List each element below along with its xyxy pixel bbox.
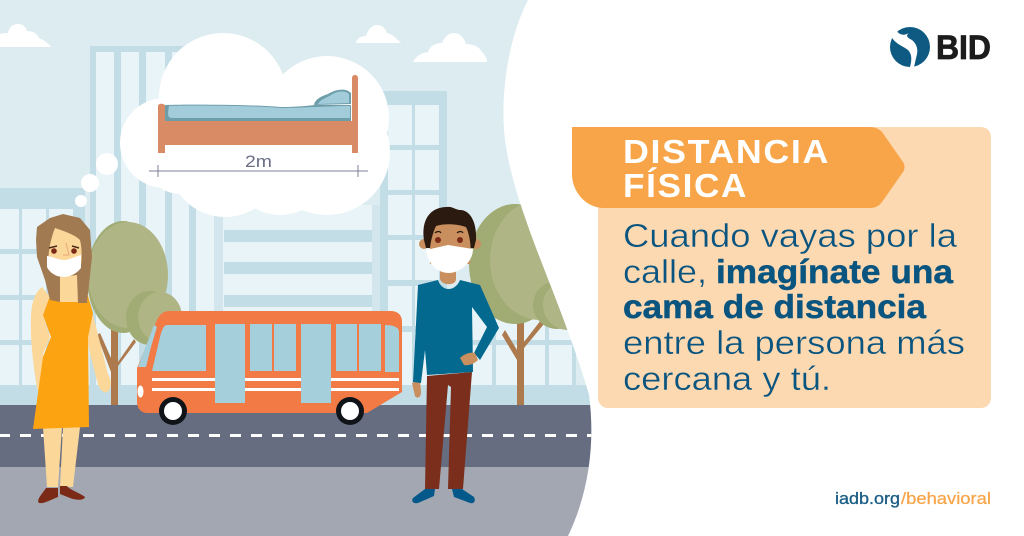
panel: message <box>572 127 991 408</box>
building: left <box>0 188 85 405</box>
cloud: top middle <box>356 25 401 43</box>
building: center horizontal stripes <box>214 205 380 311</box>
footer url: /behavioral <box>901 490 991 508</box>
thought cloud <box>75 33 390 217</box>
road centre dashes <box>0 434 600 437</box>
ground strip <box>88 385 590 406</box>
tree: right <box>469 204 568 405</box>
man <box>412 207 499 503</box>
building: right windows <box>380 91 447 385</box>
body text: Cuando vayas por la <box>623 217 958 254</box>
body text: cercana y tú. <box>623 360 831 397</box>
heading: FÍSICA <box>623 167 748 204</box>
bed length label: 2m <box>245 152 272 171</box>
road <box>0 405 600 467</box>
body text: entre la persona más <box>623 324 965 361</box>
footer url: iadb.org <box>835 490 900 508</box>
logo: BID <box>890 27 991 67</box>
heading <box>623 133 830 204</box>
building: behind right tree <box>447 300 576 385</box>
woman <box>31 214 111 503</box>
cloud: top right <box>413 33 487 62</box>
icon: globe <box>890 27 930 67</box>
body text: imagínate una <box>716 253 954 290</box>
body text <box>623 217 965 397</box>
panel background <box>598 127 991 408</box>
body text: calle, <box>623 253 707 290</box>
tree: left <box>87 221 182 405</box>
bus <box>137 311 402 425</box>
wordmark: BID <box>936 29 991 67</box>
cloud: top left <box>0 24 51 47</box>
illustrated street scene <box>0 0 600 536</box>
heading: DISTANCIA <box>623 133 830 170</box>
building: tall striped <box>90 46 222 386</box>
body text: cama de distancia <box>623 288 927 325</box>
sidewalk <box>0 467 600 536</box>
face mask <box>426 245 473 273</box>
footer url <box>835 490 991 508</box>
heading tab <box>572 127 904 208</box>
face mask <box>47 255 81 277</box>
bed with 2m measure <box>149 75 368 177</box>
